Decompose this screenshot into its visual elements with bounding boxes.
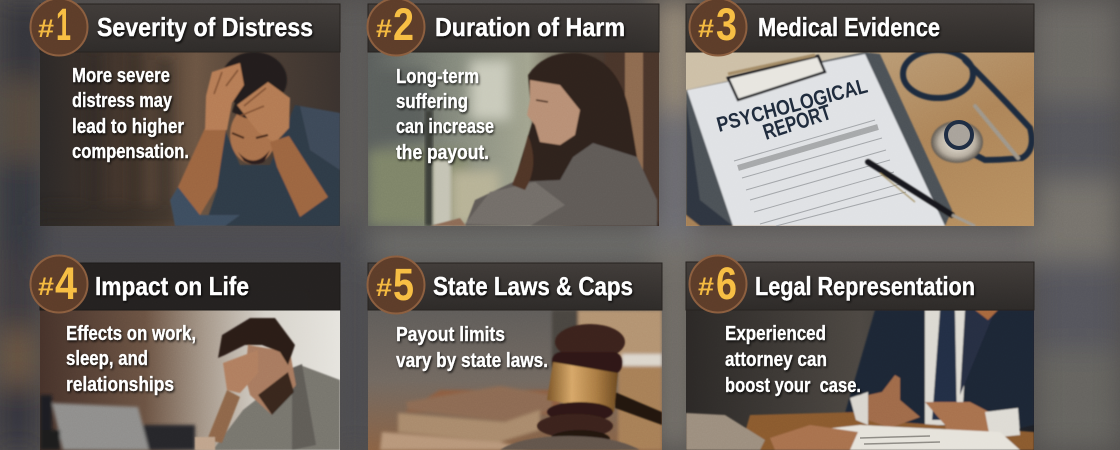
- heading: Duration of Harm: [435, 12, 625, 42]
- clipboard and paper: [686, 52, 952, 226]
- report title: PSYCHOLOGICAL: [714, 74, 870, 137]
- heading: Legal Representation: [755, 271, 975, 301]
- description: Payout limits: [396, 324, 505, 346]
- number badge: #: [376, 274, 392, 302]
- report form lines: [734, 120, 906, 226]
- description: More severe: [72, 65, 170, 87]
- number badge: [690, 0, 746, 56]
- photo: psychological report on clipboard with stethoscope: [686, 50, 1034, 226]
- photo: woman looking down by a window: [368, 52, 659, 226]
- photo: stressed man at a laptop: [40, 310, 340, 450]
- number badge: 1: [56, 0, 71, 50]
- number badge: #: [698, 273, 714, 301]
- description: suffering: [396, 91, 468, 113]
- report title: [716, 80, 868, 140]
- photo: attorney in a suit gesturing over documents: [686, 310, 1034, 450]
- description: distress may: [72, 90, 173, 112]
- description: the payout.: [396, 142, 489, 164]
- panel: legal representation: [686, 256, 1034, 450]
- description: Long-term: [396, 66, 479, 88]
- description: relationships: [66, 374, 174, 396]
- description: attorney can: [725, 349, 827, 371]
- description: [72, 65, 189, 163]
- header bar: [686, 262, 1034, 310]
- panel: severity of distress: [30, 0, 340, 226]
- number badge: [690, 256, 746, 312]
- panel: impact on life: [30, 256, 340, 450]
- number badge: #: [698, 15, 714, 43]
- header bar: [686, 4, 1034, 52]
- number badge: 2: [393, 0, 414, 50]
- description: boost your case.: [725, 375, 861, 397]
- description: [396, 66, 494, 164]
- number badge: [30, 256, 88, 312]
- description: compensation.: [72, 141, 189, 163]
- description: can increase: [396, 116, 494, 138]
- panel: state laws and caps: [368, 256, 662, 450]
- header bar: [368, 263, 662, 310]
- number badge: [30, 0, 88, 56]
- stethoscope: [903, 50, 1032, 160]
- pen: [868, 162, 975, 226]
- description: vary by state laws.: [396, 350, 548, 372]
- panel: duration of harm: [368, 0, 659, 226]
- number badge: 4: [55, 258, 77, 309]
- header bar: [40, 4, 340, 52]
- photo: gavel and law books: [368, 310, 662, 450]
- header bar: [40, 263, 340, 310]
- number badge: 5: [393, 259, 414, 310]
- heading: Impact on Life: [95, 271, 249, 301]
- number badge: 3: [716, 0, 737, 50]
- number badge: [368, 256, 424, 314]
- heading: Severity of Distress: [97, 12, 313, 42]
- number badge: 6: [716, 258, 737, 309]
- heading: State Laws & Caps: [433, 271, 633, 301]
- number badge: #: [38, 15, 54, 43]
- description: [66, 323, 196, 396]
- number badge: #: [38, 273, 54, 301]
- description: [725, 323, 861, 397]
- panel: medical evidence: [686, 0, 1034, 226]
- photo: distressed man holding his head: [40, 52, 340, 226]
- description: lead to higher: [72, 116, 184, 138]
- description: sleep, and: [66, 348, 148, 370]
- number badge: [368, 0, 424, 56]
- description: Experienced: [725, 323, 826, 345]
- description: Effects on work,: [66, 323, 196, 345]
- heading: Medical Evidence: [758, 12, 940, 42]
- description: [396, 324, 548, 372]
- report title: REPORT: [760, 99, 835, 145]
- number badge: #: [376, 15, 392, 43]
- header bar: [368, 4, 659, 52]
